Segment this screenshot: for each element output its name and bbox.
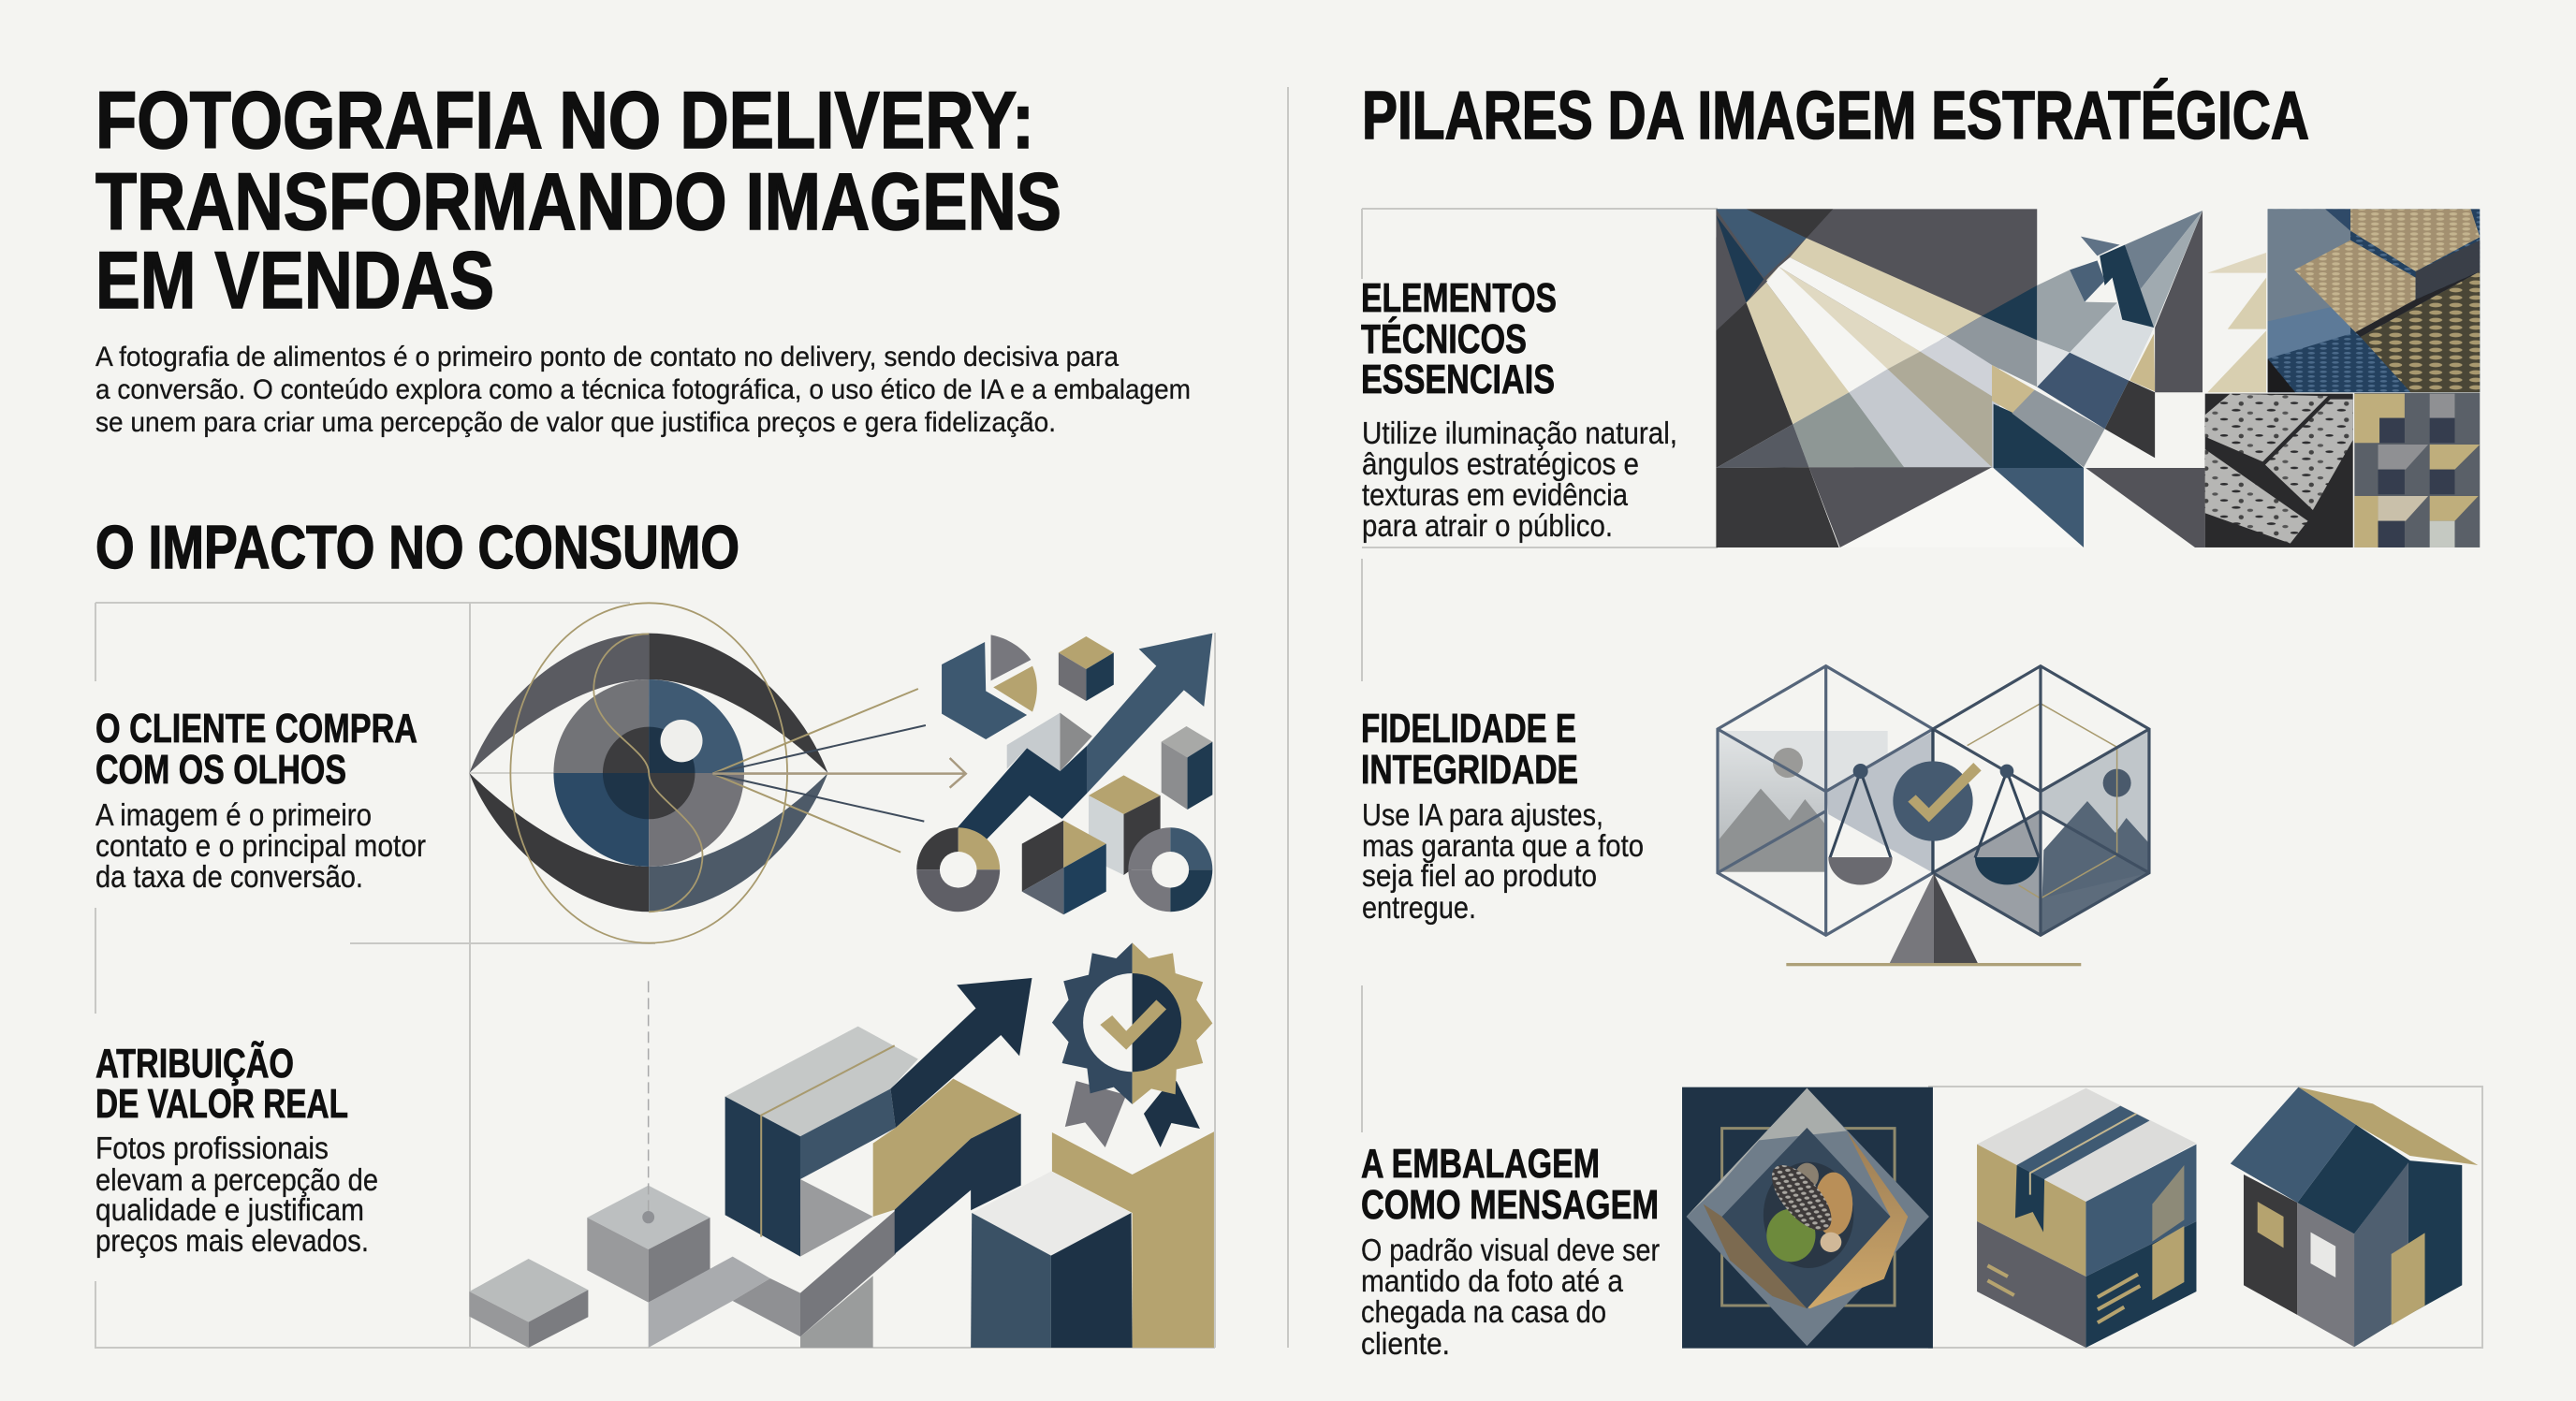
intro text: a conversão. O conteúdo explora como a técnica fotográfica, o uso ético de IA e a embalagem: [95, 374, 1191, 405]
panel: geometric grid: [2354, 393, 2480, 547]
arrow: sight rays: [712, 689, 966, 853]
text: a embalagem como mensagem: chegada na casa do: [1361, 1294, 1606, 1329]
icon: right product hexagon: [1933, 666, 2149, 935]
icon: rising arrow: [957, 634, 1212, 839]
icon: right cube: [1162, 726, 1212, 810]
icon: big cube and gold block: [971, 1131, 1214, 1348]
icon: left photo hexagon: [1718, 666, 1933, 935]
text: atribuicao de valor real: qualidade e justificam: [95, 1192, 364, 1227]
title: TRANSFORMANDO IMAGENS: [95, 157, 1061, 247]
illustration: technical elements: [1716, 209, 2480, 547]
intro text: se unem para criar uma percepção de valor que justifica preços e gera fidelização.: [95, 407, 1056, 438]
intro text: A fotografia de alimentos é o primeiro ponto de contato no delivery, sendo decisiva para: [95, 342, 1119, 372]
text: atribuicao de valor real: ATRIBUIÇÃO: [95, 1040, 294, 1087]
icon: cube behind arrow: [1007, 713, 1161, 875]
icon: medium cube with dashed line: [587, 981, 710, 1303]
text: atribuicao de valor real: Fotos profissionais: [95, 1131, 329, 1165]
text: fidelidade e integridade: Use IA para ajustes,: [1362, 797, 1603, 832]
icon: box and growth arrow: [649, 978, 1032, 1348]
icon: quality badge: [1052, 942, 1212, 1147]
text: atribuicao de valor real: DE VALOR REAL: [95, 1081, 348, 1127]
text: o cliente compra com os olhos: O CLIENTE COMPRA: [95, 706, 417, 752]
text: fidelidade e integridade: entregue.: [1362, 890, 1476, 925]
text: fidelidade e integridade: seja fiel ao produto: [1362, 858, 1597, 893]
text: atribuicao de valor real: [95, 1040, 378, 1258]
text: o cliente compra com os olhos: da taxa de conversão.: [95, 859, 363, 894]
text: fidelidade e integridade: FIDELIDADE E: [1361, 706, 1576, 752]
text: atribuicao de valor real: preços mais elevados.: [95, 1223, 369, 1258]
text: a embalagem como mensagem: A EMBALAGEM: [1361, 1141, 1600, 1187]
icon: small cube: [1059, 636, 1114, 701]
text: o cliente compra com os olhos: A imagem é o primeiro: [95, 797, 372, 832]
text: a embalagem como mensagem: O padrão visual deve ser: [1361, 1233, 1660, 1267]
text: elementos tecnicos: ELEMENTOS: [1361, 275, 1557, 321]
icon: small cube: [469, 1259, 588, 1348]
text: fidelidade e integridade: INTEGRIDADE: [1361, 747, 1578, 793]
text: a embalagem como mensagem: cliente.: [1361, 1326, 1450, 1361]
title: EM VENDAS: [95, 236, 494, 326]
icon: house: [2231, 1087, 2478, 1347]
text: a embalagem como mensagem: COMO MENSAGEM: [1361, 1182, 1659, 1228]
text: elementos tecnicos: para atrair o público.: [1362, 508, 1613, 543]
illustration: eye and data icons: [469, 603, 1212, 943]
illustration: fidelity scale: [1718, 666, 2149, 966]
text: elementos tecnicos: TÉCNICOS: [1361, 315, 1527, 362]
illustration: value growth: [469, 942, 1214, 1348]
icon: right donut: [1128, 827, 1212, 912]
title: [95, 76, 1061, 326]
text: a embalagem como mensagem: [1361, 1141, 1660, 1361]
icon: eye: [469, 603, 827, 943]
panel: blue and gold texture: [2268, 209, 2480, 392]
intro text: [95, 342, 1191, 438]
panel: stone texture: [2205, 394, 2353, 547]
icon: balance scale: [1786, 729, 2081, 966]
text: elementos tecnicos: [1361, 275, 1677, 543]
text: fidelidade e integridade: [1361, 706, 1644, 925]
icon: delivery box: [1977, 1088, 2196, 1348]
text: o cliente compra com os olhos: COM OS OLHOS: [95, 747, 346, 793]
heading: pilares: PILARES DA IMAGEM ESTRATÉGICA: [1362, 79, 2309, 153]
text: a embalagem como mensagem: mantido da foto até a: [1361, 1263, 1624, 1298]
text: atribuicao de valor real: elevam a percepção de: [95, 1162, 378, 1197]
panel: light beams composition: [1716, 209, 2266, 547]
text: elementos tecnicos: texturas em evidência: [1362, 477, 1629, 512]
panel: food photo: [1682, 1087, 1933, 1349]
text: elementos tecnicos: ângulos estratégicos e: [1362, 446, 1639, 481]
heading: o impacto no consumo: O IMPACTO NO CONSUMO: [95, 513, 739, 581]
icon: pie chart: [942, 635, 1037, 739]
text: fidelidade e integridade: mas garanta que a foto: [1362, 828, 1644, 863]
icon: hexagon: [1022, 821, 1106, 914]
text: o cliente compra com os olhos: contato e o principal motor: [95, 828, 426, 863]
text: elementos tecnicos: Utilize iluminação natural,: [1362, 416, 1677, 450]
title: FOTOGRAFIA NO DELIVERY:: [95, 76, 1034, 166]
illustration: packaging: [1682, 1087, 2478, 1349]
icon: left donut: [916, 827, 1000, 912]
text: elementos tecnicos: ESSENCIAIS: [1361, 357, 1555, 402]
text: o cliente compra com os olhos: [95, 706, 426, 894]
